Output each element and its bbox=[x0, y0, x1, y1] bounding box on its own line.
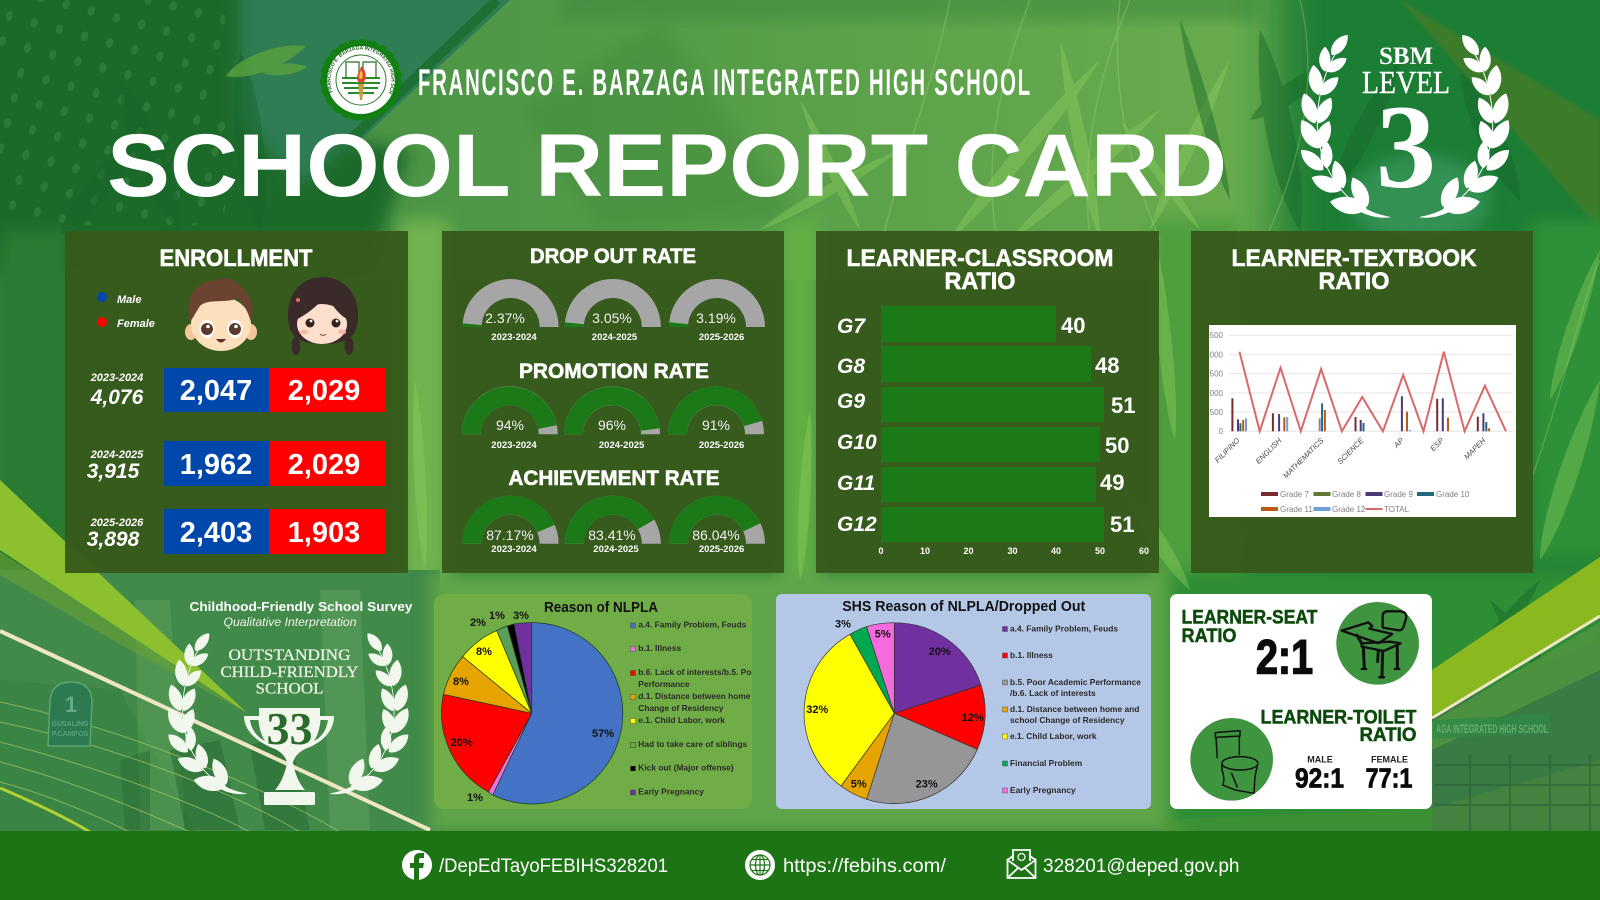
pie legend: d.1. Distance between home and bbox=[1010, 704, 1139, 714]
icon: toilet bbox=[1190, 718, 1273, 801]
legend: male and female: Female bbox=[117, 318, 155, 330]
icon: email bbox=[1008, 850, 1036, 878]
pie percentages: 1% bbox=[489, 610, 505, 622]
learner-toilet heading: LEARNER-TOILET bbox=[1260, 708, 1417, 728]
line chart: SCIENCE bbox=[1335, 435, 1366, 466]
gauge: achievement 2024-2025: 2024-2025 bbox=[593, 544, 639, 555]
award text: SCHOOL bbox=[256, 680, 324, 698]
bar chart: 10 bbox=[920, 546, 930, 556]
left laurel bbox=[163, 630, 246, 794]
email address: 328201@deped.gov.ph bbox=[1043, 856, 1240, 877]
bar chart: 51 bbox=[1111, 393, 1135, 418]
pie legend: Had to take care of siblings bbox=[638, 739, 748, 749]
survey heading: Childhood-Friendly School Survey bbox=[190, 599, 413, 614]
line chart: ESP bbox=[1428, 436, 1445, 453]
gauge: promotion 2023-2024 bbox=[462, 386, 558, 451]
pie percentages bbox=[451, 610, 614, 804]
legend: male and female bbox=[97, 292, 155, 330]
bar chart: G12 bbox=[837, 513, 877, 536]
line chart bbox=[1209, 325, 1516, 517]
gauge: achievement 2024-2025 bbox=[565, 496, 661, 555]
pie legend: /b.6. Lack of interests bbox=[1010, 688, 1096, 698]
enrollment row 2023-2024: 2023-2024 bbox=[90, 372, 143, 384]
learner-seat heading bbox=[1182, 608, 1318, 647]
line chart: MAPEH bbox=[1462, 436, 1488, 461]
enrollment row 2023-2024 bbox=[90, 368, 385, 412]
enrollment row 2023-2024: 4,076 bbox=[90, 386, 144, 409]
gauge: achievement 2023-2024: 2023-2024 bbox=[491, 544, 537, 555]
pie legend: Performance bbox=[638, 679, 690, 689]
gauge: drop out 2025-2026 bbox=[669, 279, 765, 343]
panel: SHS reason of NLPLA pie bbox=[776, 594, 1151, 809]
gauge: promotion 2024-2025: 96% bbox=[598, 417, 626, 433]
line chart: AP bbox=[1391, 436, 1405, 450]
gauge: achievement 2025-2026: 86.04% bbox=[692, 527, 740, 543]
textbook heading: RATIO bbox=[1318, 268, 1390, 295]
gauge: promotion 2024-2025 bbox=[564, 386, 660, 451]
enrollment row 2024-2025: 1,962 bbox=[180, 449, 252, 481]
pie legend: Early Pregnancy bbox=[638, 786, 704, 796]
gauge: drop out 2024-2025 bbox=[565, 279, 661, 343]
enrollment row 2024-2025: 3,915 bbox=[87, 460, 140, 483]
icon: girl face bbox=[288, 277, 358, 355]
icon: globe bbox=[745, 850, 775, 880]
pie legend: d.1. Distance between home and bbox=[638, 691, 768, 701]
learner-seat value: 2:1 bbox=[1256, 632, 1313, 684]
award text: OUTSTANDING bbox=[228, 647, 351, 664]
female toilet ratio: FEMALE bbox=[1371, 754, 1408, 764]
pie percentages: 57% bbox=[592, 728, 614, 740]
pie legend: Kick out (Major offense) bbox=[638, 762, 734, 772]
line chart: 500 bbox=[1210, 370, 1224, 378]
pie percentages: 20% bbox=[929, 646, 951, 658]
building sign in the backdrop: 1 bbox=[65, 692, 77, 717]
bar chart: 51 bbox=[1110, 512, 1134, 537]
line chart: Grade 9 bbox=[1384, 490, 1413, 499]
classroom heading: LEARNER-CLASSROOM bbox=[846, 245, 1114, 272]
pie percentages bbox=[806, 618, 984, 790]
survey subtitle: Qualitative Interpretation bbox=[224, 617, 356, 629]
header: school logo bbox=[320, 39, 402, 121]
gauge: drop out 2024-2025: 2024-2025 bbox=[592, 332, 638, 343]
textbook heading: LEARNER-TEXTBOOK bbox=[1232, 245, 1477, 272]
bar chart: 50 bbox=[1095, 546, 1105, 556]
SBM level 3 badge bbox=[1295, 31, 1515, 218]
bar chart: G11 bbox=[837, 472, 875, 495]
pie percentages: 5% bbox=[875, 628, 891, 640]
line chart: 000 bbox=[1210, 389, 1224, 398]
pie percentages: 8% bbox=[453, 676, 469, 688]
line chart: Grade 10 bbox=[1436, 490, 1470, 499]
enrollment heading: ENROLLMENT bbox=[160, 245, 313, 272]
learner-seat heading: LEARNER-SEAT bbox=[1182, 608, 1318, 628]
website: https://febihs.com/ bbox=[783, 856, 947, 877]
SBM level 3 badge: LEVEL bbox=[1362, 64, 1450, 100]
pie percentages: 20% bbox=[451, 737, 473, 749]
enrollment row 2025-2026: 1,903 bbox=[288, 517, 360, 549]
gauge: promotion 2025-2026 bbox=[668, 386, 764, 451]
pie percentages: 1% bbox=[467, 792, 483, 804]
bar chart: 60 bbox=[1139, 546, 1149, 556]
pie percentages: 3% bbox=[513, 610, 529, 622]
bar chart: 20 bbox=[963, 546, 974, 556]
header: school name: FRANCISCO E. BARZAGA INTEGRATED HIGH SCHOOL bbox=[418, 63, 1030, 104]
line chart: Grade 12 bbox=[1332, 505, 1366, 514]
icon: facebook bbox=[402, 850, 432, 880]
bar chart: G7 bbox=[837, 315, 866, 338]
pie legend: b.6. Lack of interests/b.5. Poor bbox=[638, 667, 761, 677]
gauge: achievement 2025-2026 bbox=[669, 496, 765, 555]
pie chart bbox=[442, 623, 623, 804]
school name banner in the backdrop bbox=[1433, 714, 1550, 739]
panel: learner-classroom ratio bbox=[816, 231, 1159, 573]
promotion rate heading: PROMOTION RATE bbox=[519, 360, 709, 383]
panel: rates bbox=[442, 231, 784, 573]
bar chart bbox=[837, 306, 1149, 556]
bar chart: 0 bbox=[878, 546, 884, 556]
gauge: drop out 2023-2024: 2.37% bbox=[485, 310, 525, 326]
icon: school desk bbox=[1336, 602, 1419, 685]
icon: trophy with 33: 33 bbox=[266, 703, 312, 754]
pie legend: e.1. Child Labor, work bbox=[1010, 731, 1097, 741]
learner-toilet heading bbox=[1260, 708, 1417, 746]
childhood-friendly school survey award bbox=[163, 599, 414, 805]
line chart: FILIPINO bbox=[1213, 436, 1242, 465]
enrollment row 2025-2026 bbox=[87, 509, 385, 554]
female toilet ratio bbox=[1366, 754, 1412, 794]
line chart: Grade 11 bbox=[1280, 505, 1313, 514]
line chart: 000 bbox=[1210, 350, 1224, 360]
gauge: promotion 2024-2025: 2024-2025 bbox=[599, 440, 645, 451]
pie heading: Reason of NLPLA bbox=[544, 600, 658, 616]
right laurel bbox=[330, 630, 414, 794]
male toilet ratio: 92:1 bbox=[1295, 762, 1344, 794]
enrollment row 2025-2026: 2025-2026 bbox=[90, 517, 144, 529]
pie percentages: 5% bbox=[851, 778, 867, 790]
building sign in the backdrop: GUSALING bbox=[52, 721, 89, 728]
textbook heading bbox=[1232, 245, 1477, 295]
pie legend bbox=[1002, 624, 1141, 795]
building sign in the backdrop: P.CAMPOS bbox=[52, 731, 89, 738]
pie percentages: 8% bbox=[476, 646, 492, 658]
enrollment row 2025-2026: 2,403 bbox=[180, 517, 252, 549]
bar chart: 40 bbox=[1051, 546, 1061, 556]
pie percentages: 23% bbox=[916, 778, 938, 790]
learner-toilet heading: RATIO bbox=[1360, 725, 1416, 746]
pie legend: a.4. Family Problem, Feuds bbox=[638, 620, 747, 630]
main title: SCHOOL REPORT CARD bbox=[107, 115, 1227, 215]
bar chart: 49 bbox=[1100, 470, 1124, 495]
pie heading: SHS Reason of NLPLA/Dropped Out bbox=[842, 599, 1085, 615]
bar chart: G9 bbox=[837, 390, 865, 413]
gauge: promotion 2025-2026: 91% bbox=[702, 417, 730, 433]
gauge: achievement 2025-2026: 2025-2026 bbox=[699, 544, 744, 555]
gauge: drop out 2025-2026: 2025-2026 bbox=[699, 332, 744, 343]
faint leaf blades in the backdrop bbox=[409, 39, 1600, 593]
bar chart: 30 bbox=[1007, 546, 1018, 556]
gauge: drop out 2025-2026: 3.19% bbox=[696, 310, 736, 326]
panel: reason of NLPLA pie bbox=[434, 594, 768, 809]
bar chart: 50 bbox=[1105, 433, 1129, 458]
classroom heading bbox=[846, 245, 1114, 295]
pie legend bbox=[630, 622, 752, 796]
pie legend: a.4. Family Problem, Feuds bbox=[1010, 624, 1118, 634]
panel: learner-textbook ratio bbox=[1191, 231, 1533, 573]
gauge: promotion 2025-2026: 2025-2026 bbox=[699, 440, 744, 451]
enrollment row 2023-2024: 2,047 bbox=[180, 375, 252, 407]
line chart: Grade 8 bbox=[1332, 490, 1361, 499]
pie legend: b.1. Illness bbox=[638, 643, 681, 653]
panel: seat and toilet ratios bbox=[1170, 594, 1432, 809]
pie legend: Financial Problem bbox=[1010, 758, 1082, 768]
achievement rate heading: ACHIEVEMENT RATE bbox=[508, 467, 720, 490]
legend: male and female: Male bbox=[117, 294, 141, 306]
bar chart: G10 bbox=[837, 431, 877, 454]
pie legend: e.1. Child Labor, work bbox=[638, 715, 725, 725]
pie legend: Change of Residency bbox=[638, 703, 724, 713]
bar chart: 48 bbox=[1095, 353, 1119, 378]
SBM level 3 badge: 3 bbox=[1376, 80, 1436, 213]
learner-seat heading: RATIO bbox=[1182, 626, 1236, 647]
award text bbox=[220, 647, 359, 698]
line chart: 500 bbox=[1210, 408, 1224, 417]
bar chart: 40 bbox=[1061, 313, 1085, 338]
gauge: promotion 2023-2024: 94% bbox=[496, 417, 524, 433]
enrollment row 2024-2025: 2,029 bbox=[288, 449, 360, 481]
icon: boy face bbox=[185, 278, 257, 351]
gauge: achievement 2023-2024 bbox=[463, 496, 559, 555]
pie legend: b.1. Illness bbox=[1010, 650, 1053, 660]
line chart: 500 bbox=[1210, 331, 1224, 340]
line chart: 0 bbox=[1219, 427, 1224, 436]
gauge: drop out 2023-2024 bbox=[463, 279, 559, 343]
gauge: achievement 2024-2025: 83.41% bbox=[588, 527, 636, 543]
enrollment row 2025-2026: 3,898 bbox=[87, 528, 140, 551]
male toilet ratio: MALE bbox=[1307, 754, 1333, 764]
footer bar bbox=[0, 831, 1600, 900]
line chart: MATHEMATICS bbox=[1281, 436, 1325, 480]
icon: trophy with 33 bbox=[244, 703, 334, 805]
facebook handle: /DepEdTayoFEBIHS328201 bbox=[439, 856, 668, 877]
pie legend: Early Pregnancy bbox=[1010, 785, 1076, 795]
bar chart: G8 bbox=[837, 355, 865, 378]
award text: CHILD-FRIENDLY bbox=[220, 664, 359, 681]
line chart: Grade 7 bbox=[1280, 490, 1309, 499]
gauge: drop out 2024-2025: 3.05% bbox=[592, 310, 632, 326]
pie legend: b.5. Poor Academic Performance bbox=[1010, 677, 1141, 687]
gauge: promotion 2023-2024: 2023-2024 bbox=[491, 440, 537, 451]
enrollment row 2023-2024: 2,029 bbox=[288, 375, 360, 407]
pie legend: school Change of Residency bbox=[1010, 715, 1125, 725]
line chart: TOTAL bbox=[1384, 505, 1410, 514]
pie percentages: 12% bbox=[962, 712, 984, 724]
pie percentages: 2% bbox=[470, 617, 486, 629]
drop out rate heading: DROP OUT RATE bbox=[530, 245, 696, 268]
SBM level 3 badge: SBM bbox=[1379, 43, 1433, 70]
building sign in the backdrop bbox=[48, 682, 92, 746]
female toilet ratio: 77:1 bbox=[1366, 762, 1412, 794]
enrollment row 2024-2025: 2024-2025 bbox=[90, 449, 144, 461]
line chart: ENGLISH bbox=[1254, 436, 1284, 466]
gauge: achievement 2023-2024: 87.17% bbox=[486, 527, 534, 543]
enrollment row 2024-2025 bbox=[87, 441, 385, 486]
panel: enrollment bbox=[65, 231, 408, 573]
pie percentages: 3% bbox=[835, 618, 851, 630]
gauge: drop out 2023-2024: 2023-2024 bbox=[491, 332, 537, 343]
pie chart bbox=[804, 623, 985, 804]
classroom heading: RATIO bbox=[944, 268, 1016, 295]
pie percentages: 32% bbox=[806, 704, 829, 716]
